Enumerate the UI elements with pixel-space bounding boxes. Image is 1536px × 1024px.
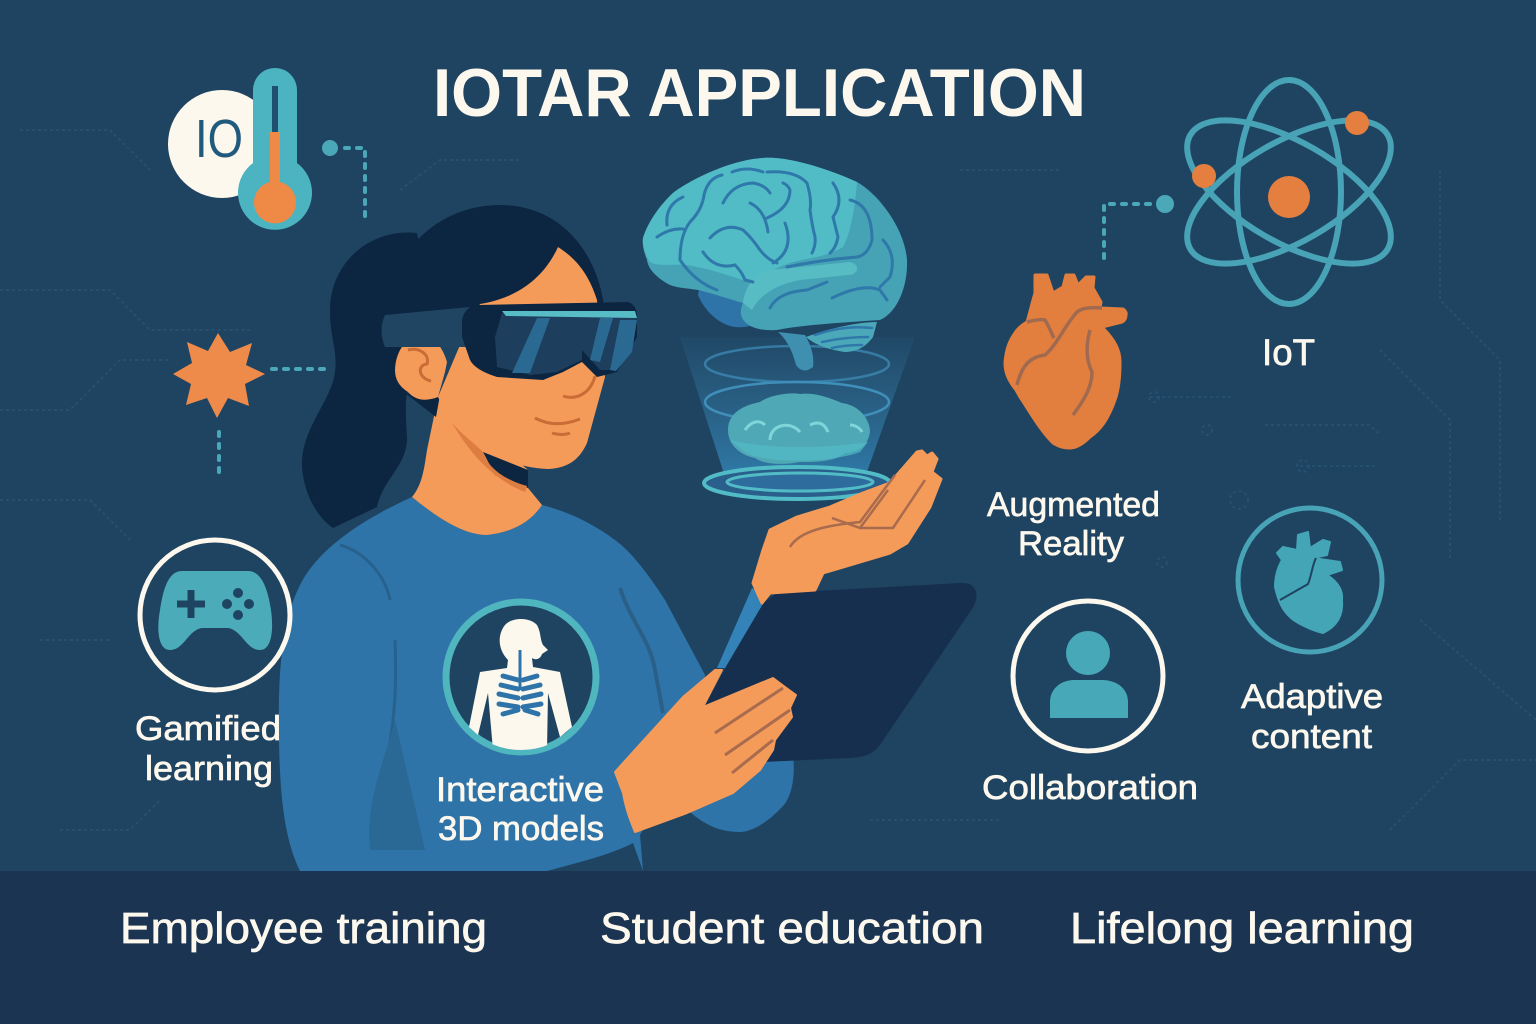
label: Interactive 3D models: 3D models: [438, 810, 604, 848]
wrist sleeve: [717, 588, 767, 668]
main brain: [643, 158, 907, 371]
figure: woman with VR headset: [279, 205, 794, 871]
ear: [395, 336, 447, 400]
label: Adaptive content: Adaptive: [1241, 678, 1383, 716]
icon: skeleton badge: [446, 602, 596, 752]
torso: [279, 497, 705, 871]
icon: collaboration person: [1013, 601, 1163, 751]
icon: gamepad: [140, 540, 290, 690]
label: Augmented Reality: Augmented: [987, 486, 1160, 524]
face: [438, 247, 605, 469]
VR headset: [462, 302, 637, 380]
icon: orange star burst: [173, 333, 265, 418]
label: Gamified learning: learning: [145, 750, 273, 788]
hand raised: [753, 451, 941, 603]
band: bottom audience strip: [0, 871, 1536, 1024]
headset strap: [382, 307, 470, 347]
neck: [412, 397, 542, 535]
title: IOTAR APPLICATION: [433, 55, 1086, 131]
label: Augmented Reality: Reality: [1018, 525, 1124, 563]
hand holding tablet: [615, 670, 796, 832]
sleeve: [690, 755, 794, 832]
icon: atom: [1165, 80, 1413, 304]
icon: IO thermometer: [168, 68, 312, 230]
label: Adaptive content: [1241, 678, 1383, 756]
brainstem: [778, 332, 813, 371]
label: Adaptive content: content: [1251, 718, 1373, 756]
label: Interactive 3D models: [436, 771, 604, 848]
cerebellum: [806, 322, 877, 352]
label: Augmented Reality: [987, 486, 1160, 563]
label: Employee training: Employee training: [120, 904, 487, 953]
label: Gamified learning: [135, 710, 281, 788]
ring platform: [704, 467, 890, 499]
label: Interactive 3D models: Interactive: [436, 771, 604, 809]
hologram cone: [680, 337, 915, 483]
ponytail: [302, 233, 440, 528]
hair behind jaw: [405, 393, 528, 488]
icon: anatomical heart: [1005, 275, 1126, 448]
hologram brain: [643, 158, 915, 499]
hair dome: [385, 205, 604, 320]
tablet: [703, 583, 976, 762]
small brain: [728, 393, 870, 464]
jaw shadow: [452, 423, 527, 492]
label: Collaboration: Collaboration: [982, 769, 1198, 807]
label: Gamified learning: Gamified: [135, 710, 281, 748]
label: Student education: Student education: [600, 904, 984, 953]
icon: heart circle: [1238, 508, 1382, 652]
icon: IO thermometer: IO: [195, 109, 243, 169]
label: Lifelong learning: Lifelong learning: [1070, 904, 1414, 953]
label: IoT: IoT: [1262, 332, 1315, 373]
